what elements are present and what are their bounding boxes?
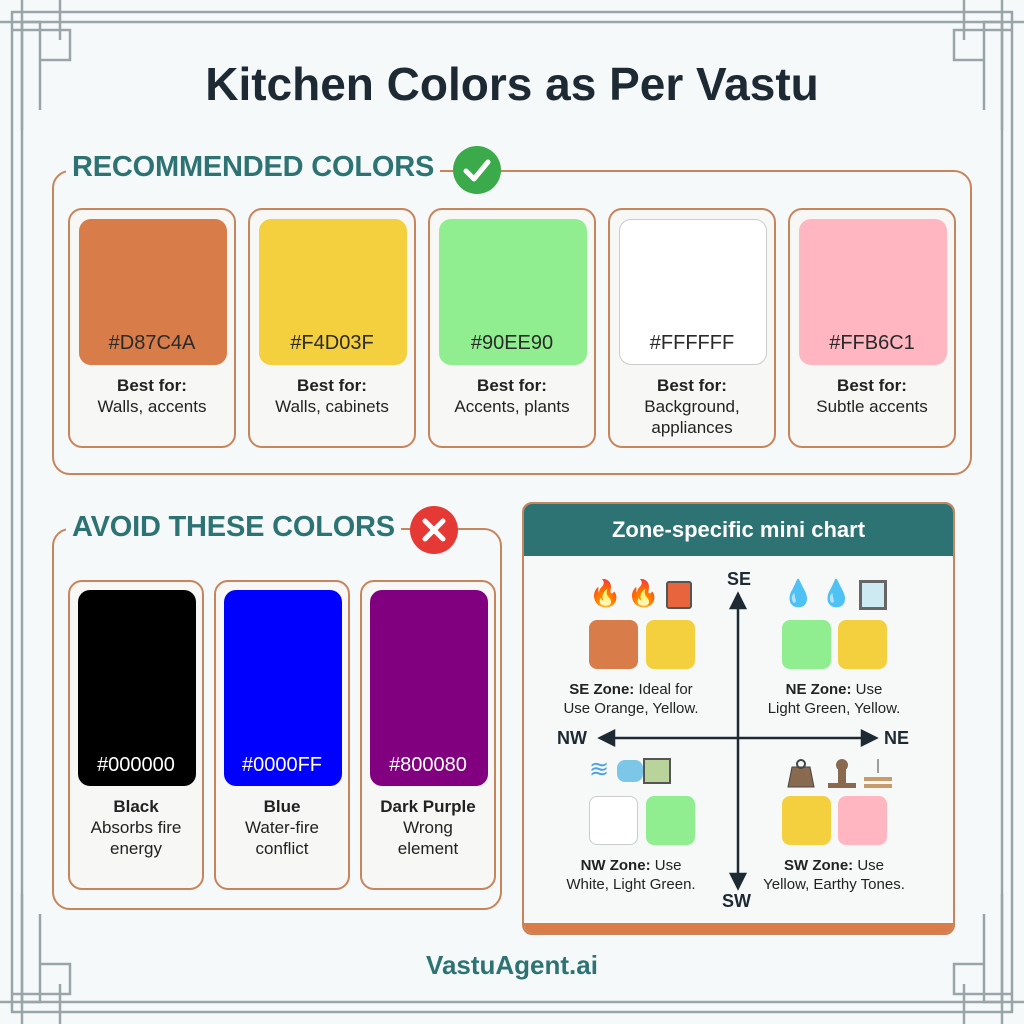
card: blue: Blue [264, 797, 300, 816]
icon: cross [410, 506, 458, 554]
SE quadrant: Use Orange, Yellow. [563, 700, 699, 717]
card: D87C4A: Walls, accents [98, 397, 206, 416]
icons: water: 💧💧 [782, 578, 859, 608]
SW quadrant: SW Zone: Use [784, 857, 884, 874]
icons: water [782, 578, 887, 610]
card: black: Absorbs fire [91, 818, 181, 837]
card: black: #000000 [97, 754, 175, 776]
NE quadrant [768, 578, 900, 717]
card: D87C4A: #D87C4A [109, 332, 195, 354]
card: D87C4A: Best for: [117, 376, 187, 395]
NE quadrant: NE Zone: Use [786, 681, 882, 698]
panel: avoid colors [52, 528, 502, 910]
icons: fire: 🔥🔥 [589, 578, 666, 608]
icons: air: ≋ [589, 756, 617, 783]
text: SE [727, 569, 751, 589]
card: black: energy [110, 839, 162, 858]
card: FFFFFF: Best for: [657, 376, 727, 395]
text: NW [557, 728, 587, 748]
card: blue [214, 580, 350, 890]
card: FFFFFF: appliances [651, 418, 733, 437]
card: dark purple: Dark Purple [380, 797, 476, 816]
icon: check [453, 146, 501, 194]
text: SW [722, 891, 751, 911]
card: D87C4A [68, 208, 236, 448]
card: F4D03F: #F4D03F [290, 332, 374, 354]
panel: zone chart [522, 502, 955, 935]
card: F4D03F: Best for: [297, 376, 367, 395]
SW quadrant [763, 759, 905, 893]
card: 90EE90: Accents, plants [454, 397, 570, 416]
text: NE [884, 728, 909, 748]
card: dark purple: Wrong [403, 818, 453, 837]
card: dark purple [360, 580, 496, 890]
direction labels [557, 569, 909, 911]
card: black: Black [113, 797, 159, 816]
icons: air [589, 756, 671, 784]
NW quadrant: NW Zone: Use [581, 857, 681, 874]
heading: avoid colors: AVOID THESE COLORS [72, 511, 395, 543]
card: blue: #0000FF [242, 754, 322, 776]
card: blue: Water-fire [245, 818, 319, 837]
card: F4D03F: Walls, cabinets [275, 397, 389, 416]
heading: recommended colors: RECOMMENDED COLORS [72, 151, 434, 183]
card: dark purple: #800080 [389, 754, 467, 776]
icons: earth [787, 759, 892, 788]
card: FFB6C1: #FFB6C1 [829, 332, 915, 354]
SW quadrant: Yellow, Earthy Tones. [763, 876, 905, 893]
card: FFFFFF [608, 208, 776, 448]
NW quadrant: White, Light Green. [566, 876, 696, 893]
SE quadrant: SE Zone: Ideal for [569, 681, 693, 698]
title: Kitchen Colors as Per Vastu [205, 58, 819, 110]
card: FFFFFF: Background, [644, 397, 740, 416]
card: 90EE90 [428, 208, 596, 448]
card: FFB6C1 [788, 208, 956, 448]
panel: recommended colors [52, 170, 972, 475]
card: black [68, 580, 204, 890]
card: FFB6C1: Best for: [837, 376, 907, 395]
card: dark purple: element [398, 839, 458, 858]
footer: VastuAgent.ai [426, 950, 598, 980]
card: F4D03F [248, 208, 416, 448]
NE quadrant: Light Green, Yellow. [768, 700, 900, 717]
NW quadrant [566, 756, 696, 893]
card: FFB6C1: Subtle accents [816, 397, 928, 416]
card: blue: conflict [256, 839, 308, 858]
zone chart header: Zone-specific mini chart [612, 517, 865, 542]
SE quadrant [563, 578, 699, 717]
zone chart header [524, 504, 953, 556]
card: 90EE90: #90EE90 [471, 332, 553, 354]
compass arrows [597, 591, 879, 891]
card: FFFFFF: #FFFFFF [650, 332, 734, 354]
card: 90EE90: Best for: [477, 376, 547, 395]
